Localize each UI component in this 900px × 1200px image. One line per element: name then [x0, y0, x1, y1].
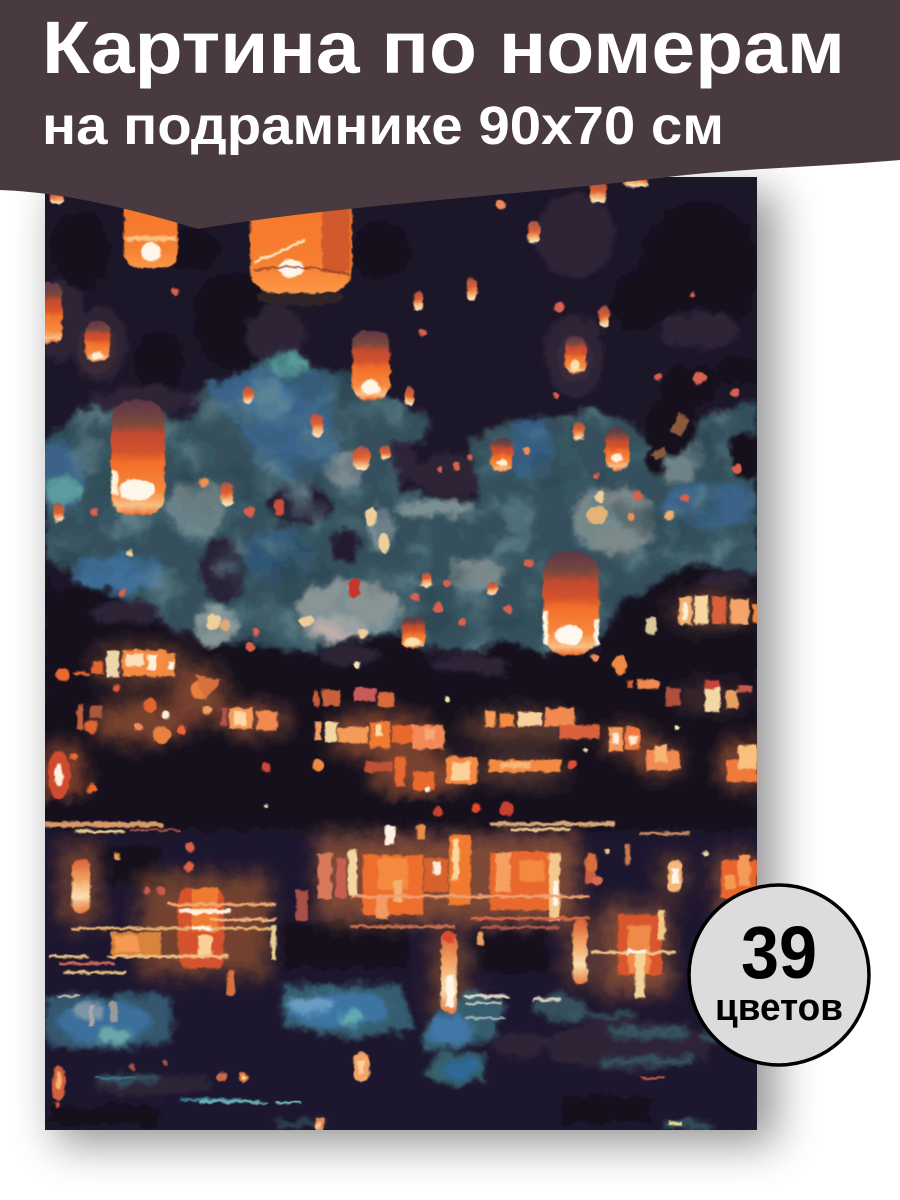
lantern largest top [248, 208, 354, 307]
lantern large top left [122, 208, 180, 270]
water teal and purple streaks [90, 1013, 720, 1129]
lantern left edge [45, 280, 64, 345]
cream cloud lights [127, 491, 607, 638]
cloud gray areas [168, 478, 228, 538]
town soft glows [38, 592, 766, 807]
painted background: sky, clouds, town, water [45, 192, 757, 1130]
badge: 39 colours [689, 885, 869, 1065]
title banner [0, 0, 900, 229]
lantern right upper [557, 334, 593, 382]
water blue reflections [45, 985, 584, 1085]
lantern large left [111, 400, 165, 515]
sky dots [90, 200, 742, 652]
sky patches [45, 192, 755, 498]
pagoda windows [646, 596, 758, 634]
water left reflection [45, 822, 308, 996]
cloud shadow mottling [45, 340, 757, 660]
title: Картина по номерам [42, 6, 845, 89]
water dark zones [45, 800, 757, 1127]
cloud mottling [46, 376, 757, 656]
town lights [48, 653, 757, 817]
tree branches [651, 413, 690, 461]
town silhouette [45, 563, 757, 815]
lantern right mid [605, 428, 629, 470]
small lanterns [50, 172, 648, 597]
water right reflections [441, 845, 757, 1125]
water surface [45, 968, 720, 1130]
canvas drop shadow [56, 192, 776, 1144]
lantern upper left [77, 321, 117, 374]
cloud masses [34, 350, 758, 655]
lantern low centre [402, 617, 425, 648]
town purple shades [91, 573, 753, 675]
label: цветов [715, 987, 843, 1029]
cloud dark holes [268, 483, 332, 527]
water soft glows [60, 835, 760, 1015]
painting: night lanterns over water [45, 177, 757, 1130]
lantern center [352, 330, 390, 400]
water lower lights [52, 995, 369, 1130]
lights and lanterns layer [38, 172, 758, 1130]
cloud blue upper [205, 360, 345, 480]
number: 39 [741, 911, 817, 994]
water centre reflection [318, 822, 690, 929]
left building windows [56, 650, 175, 682]
lantern centre right [491, 438, 513, 472]
subtitle: на подрамнике 90х70 см [42, 96, 724, 156]
tree foliage [644, 356, 764, 479]
lantern large right [543, 551, 599, 655]
